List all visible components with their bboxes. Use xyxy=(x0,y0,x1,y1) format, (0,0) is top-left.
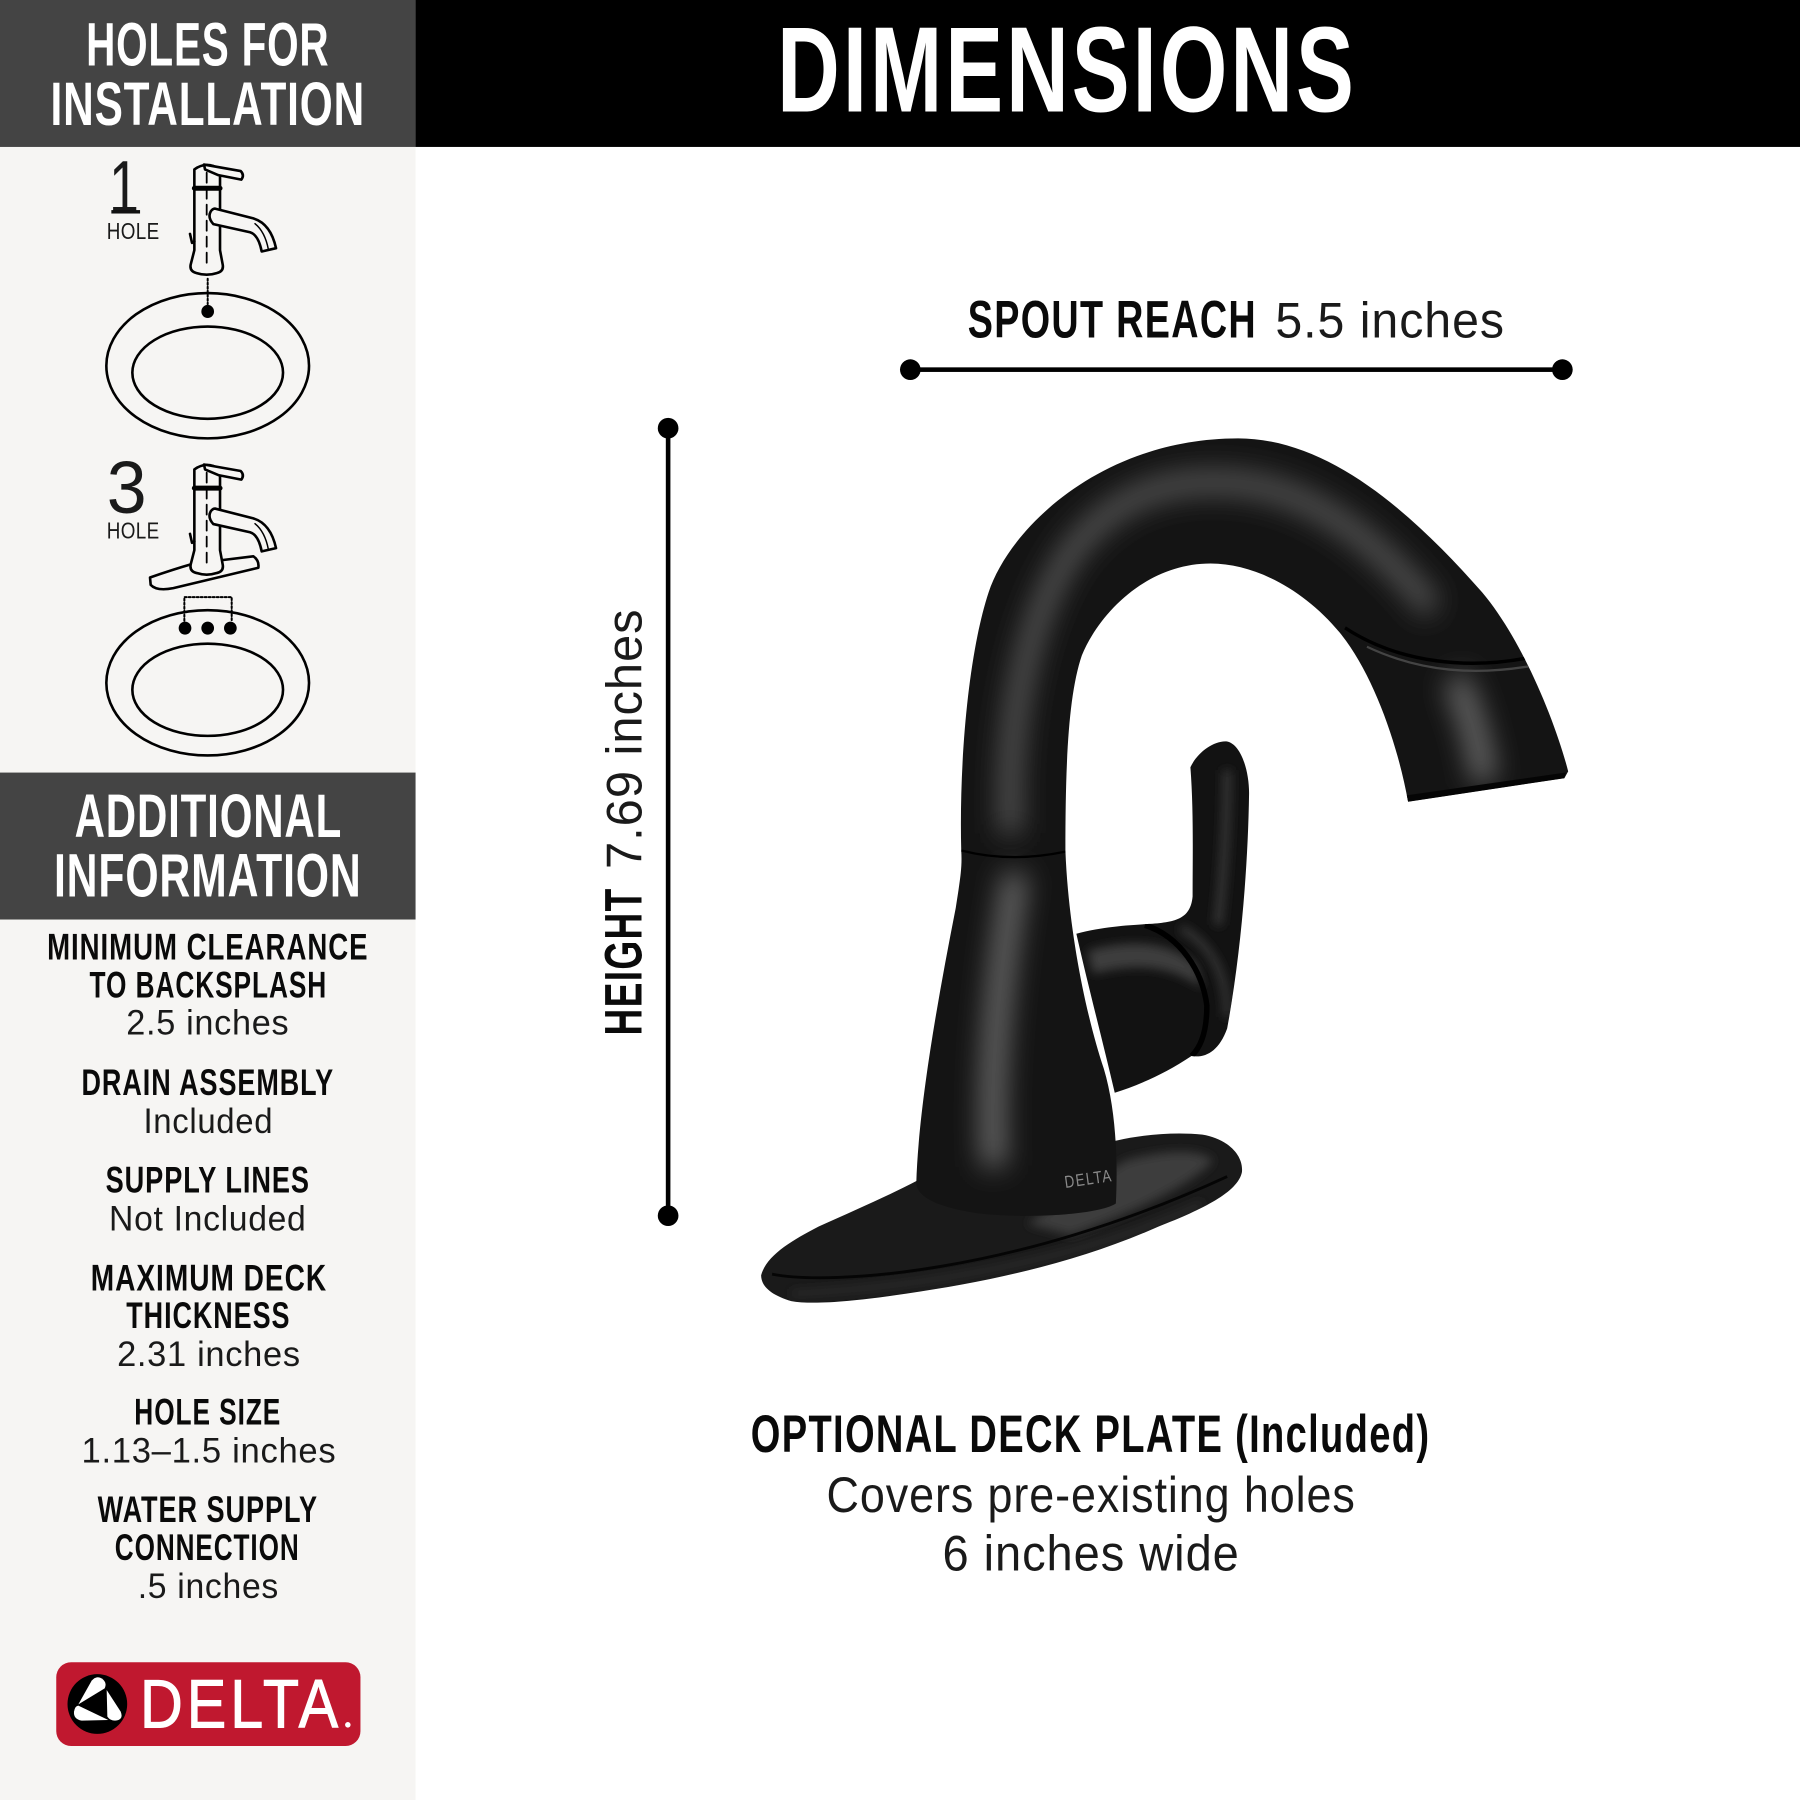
text block: minimum clearance to backsplash xyxy=(47,927,368,1042)
text block: maximum deck thickness: THICKNESS xyxy=(126,1295,290,1336)
arrow: spout reach dimension line xyxy=(900,359,1573,380)
body and spout xyxy=(916,438,1568,1216)
text block: maximum deck thickness xyxy=(91,1257,327,1374)
text block: supply lines xyxy=(106,1160,310,1239)
text block: water supply connection: .5 inches xyxy=(138,1566,279,1606)
arrow: height dimension line xyxy=(658,418,678,1226)
icon: three hole installation xyxy=(106,445,309,755)
logo: Delta: DELTA xyxy=(140,1666,342,1743)
text block: water supply connection: CONNECTION xyxy=(115,1527,300,1568)
body and spout: DELTA xyxy=(1063,1166,1114,1192)
text block: maximum deck thickness: 2.31 inches xyxy=(117,1334,301,1374)
caption: optional deck plate: Covers pre-existing holes xyxy=(827,1466,1356,1523)
caption: optional deck plate: 6 inches wide xyxy=(942,1524,1240,1581)
text block: drain assembly: Included xyxy=(143,1101,273,1141)
text block: supply lines: SUPPLY LINES xyxy=(106,1160,310,1201)
label: height xyxy=(595,608,654,1035)
header: additional information: INFORMATION xyxy=(54,842,362,910)
caption: optional deck plate xyxy=(751,1405,1430,1581)
text block: hole size: HOLE SIZE xyxy=(134,1392,281,1433)
header: additional information xyxy=(0,773,416,920)
header: additional information: ADDITIONAL xyxy=(75,782,342,850)
panel: left sidebar background xyxy=(0,0,416,1800)
text block: minimum clearance to backsplash: MINIMUM CLEARANCE xyxy=(47,927,368,968)
icon: one hole installation: HOLE xyxy=(107,218,160,244)
text block: maximum deck thickness: MAXIMUM DECK xyxy=(91,1257,327,1298)
text block: drain assembly: DRAIN ASSEMBLY xyxy=(82,1062,334,1103)
label: height: HEIGHT xyxy=(595,887,654,1035)
header: dimensions: DIMENSIONS xyxy=(777,1,1357,137)
header: holes for installation: INSTALLATION xyxy=(51,70,365,138)
text block: minimum clearance to backsplash: 2.5 inches xyxy=(126,1002,289,1042)
header: holes for installation: HOLES FOR xyxy=(86,10,329,78)
icon: one hole installation xyxy=(106,144,309,438)
text block: water supply connection xyxy=(98,1489,318,1606)
label: spout reach: SPOUT REACH xyxy=(968,290,1257,349)
text block: minimum clearance to backsplash: TO BACKSPLASH xyxy=(90,965,327,1006)
header: holes for installation xyxy=(0,0,416,147)
icon: one hole installation: 1 xyxy=(109,144,140,228)
product image: black faucet xyxy=(761,438,1568,1303)
text block: water supply connection: WATER SUPPLY xyxy=(98,1489,318,1530)
label: height: 7.69 inches xyxy=(596,608,653,869)
logo: Delta xyxy=(56,1662,360,1746)
handle xyxy=(1076,741,1249,1093)
deck plate xyxy=(761,1134,1242,1303)
caption: optional deck plate: OPTIONAL DECK PLATE (Included) xyxy=(751,1405,1430,1464)
icon: three hole installation: 3 xyxy=(107,445,148,529)
text block: hole size: 1.13–1.5 inches xyxy=(82,1431,336,1471)
text block: hole size xyxy=(82,1392,336,1471)
text block: supply lines: Not Included xyxy=(109,1199,307,1239)
icon: three hole installation: HOLE xyxy=(107,517,160,543)
label: spout reach: 5.5 inches xyxy=(1275,291,1505,348)
text block: drain assembly xyxy=(82,1062,334,1141)
header: dimensions xyxy=(416,0,1800,147)
